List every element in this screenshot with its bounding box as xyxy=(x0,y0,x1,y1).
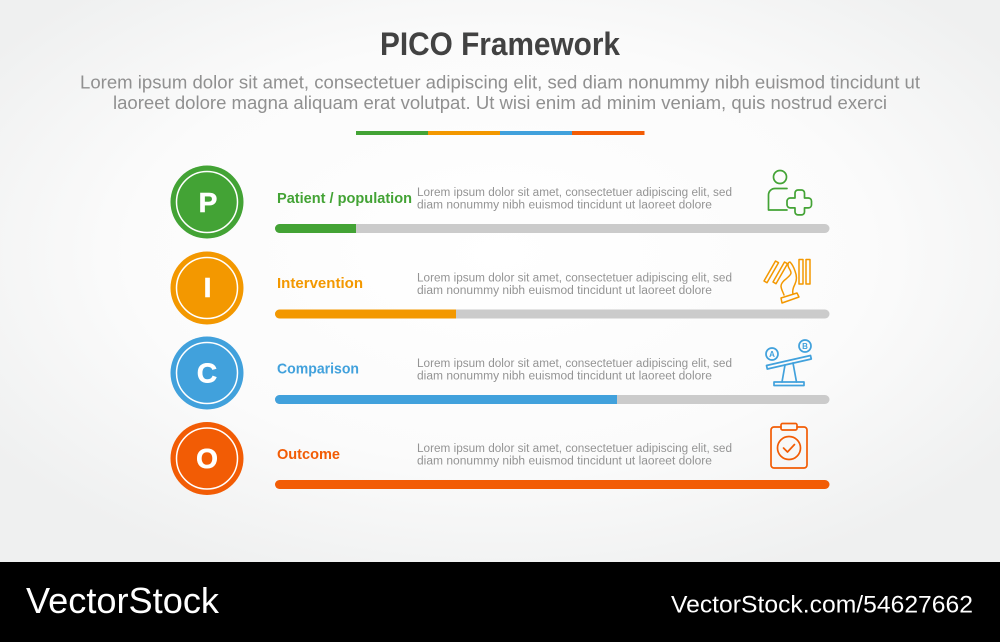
description: diam nonummy nibh euismod tincidunt ut laoreet dolore xyxy=(417,200,712,212)
description: Lorem ipsum dolor sit amet, consectetuer adipiscing elit, sed xyxy=(417,358,732,370)
footer url: VectorStock.com/54627662 xyxy=(671,592,973,618)
description xyxy=(417,443,732,468)
icon: seesaw comparing A and B xyxy=(766,340,811,386)
circle badge O xyxy=(170,422,244,495)
progress bar xyxy=(275,395,830,404)
circle badge P xyxy=(170,166,244,238)
icon: seesaw comparing A and B: B xyxy=(802,342,808,351)
description: diam nonummy nibh euismod tincidunt ut laoreet dolore xyxy=(417,370,712,382)
circle badge O: O xyxy=(196,443,218,474)
icon: hand stopping falling dominoes xyxy=(764,260,810,303)
description: Lorem ipsum dolor sit amet, consectetuer adipiscing elit, sed xyxy=(417,443,732,455)
description xyxy=(417,272,732,297)
label: Intervention xyxy=(277,275,363,292)
row: outcome xyxy=(170,422,830,495)
description xyxy=(417,187,732,212)
subtitle text xyxy=(80,72,920,113)
icon: clipboard with check mark xyxy=(771,424,807,468)
description: Lorem ipsum dolor sit amet, consectetuer adipiscing elit, sed xyxy=(417,187,732,199)
title: PICO Framework xyxy=(380,26,620,62)
row: comparison xyxy=(170,336,830,410)
circle badge I xyxy=(170,252,244,324)
circle badge C xyxy=(170,336,244,410)
row: patient / population xyxy=(170,166,830,238)
description: diam nonummy nibh euismod tincidunt ut laoreet dolore xyxy=(417,285,712,297)
icon: seesaw comparing A and B: A xyxy=(769,350,775,359)
icon: person with medical cross xyxy=(768,170,812,215)
footer bar xyxy=(0,562,1000,642)
circle badge C: C xyxy=(197,358,217,388)
progress bar xyxy=(275,480,830,489)
description: Lorem ipsum dolor sit amet, consectetuer adipiscing elit, sed xyxy=(417,272,732,284)
subtitle text: laoreet dolore magna aliquam erat volutpat. Ut wisi enim ad minim veniam, quis nostrud exerci xyxy=(113,93,887,113)
circle badge P: P xyxy=(199,187,217,218)
footer logo: VectorStock xyxy=(26,580,220,621)
label: Patient / population xyxy=(277,190,412,207)
row: intervention xyxy=(170,252,830,324)
description xyxy=(417,358,732,382)
title divider xyxy=(356,131,644,135)
label: Comparison xyxy=(277,360,359,378)
circle badge I: I xyxy=(204,272,211,303)
progress bar xyxy=(275,224,830,233)
description: diam nonummy nibh euismod tincidunt ut laoreet dolore xyxy=(417,456,712,468)
label: Outcome xyxy=(277,446,340,463)
subtitle text: Lorem ipsum dolor sit amet, consectetuer adipiscing elit, sed diam nonummy nibh euismod tincidunt ut xyxy=(80,72,920,92)
progress bar xyxy=(275,310,830,318)
